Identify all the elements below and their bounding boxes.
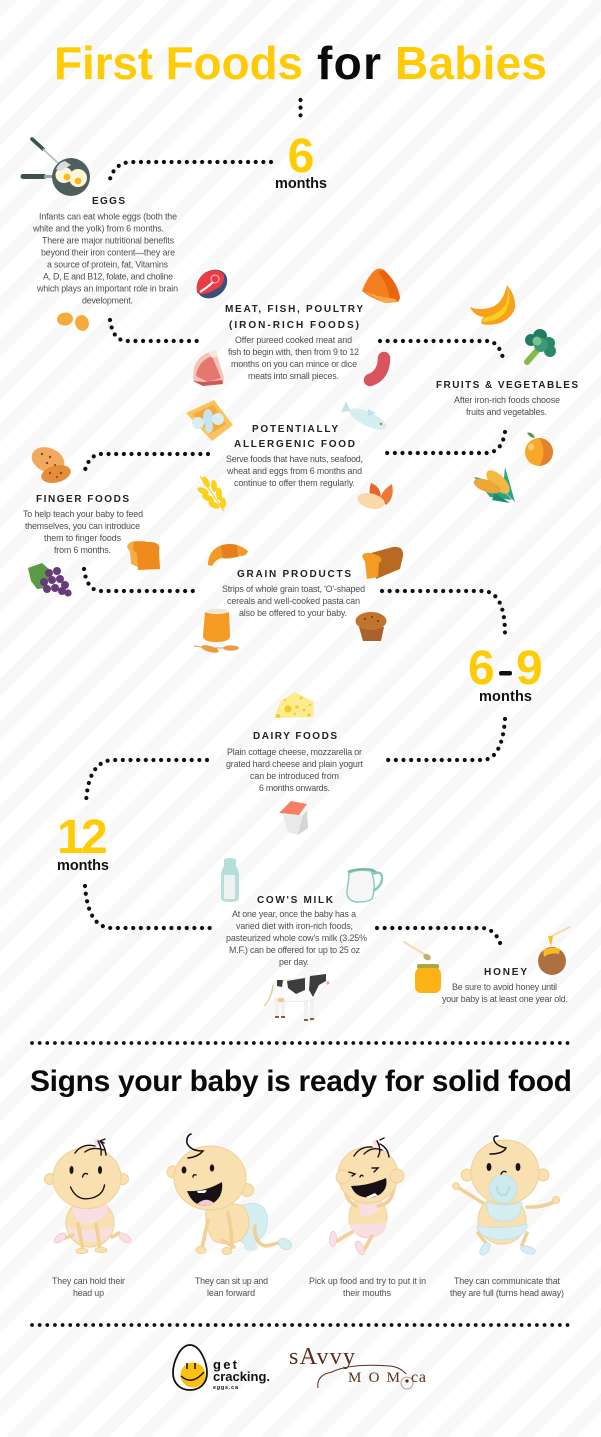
- logo: savvy mom: ca: [411, 1369, 426, 1386]
- panel: dairy foods: [226, 692, 364, 835]
- panel: honey: [404, 927, 570, 1004]
- caption: Pick up food and try to put it in: [309, 1276, 426, 1286]
- milestone: 12 months: 2: [81, 811, 108, 864]
- text: fruits description: After iron-rich foods choose: [454, 395, 560, 405]
- panel: sign 3: [309, 1138, 426, 1298]
- caption: [52, 1276, 125, 1298]
- milestone: 12 months: 1: [57, 811, 84, 864]
- text: honey description: [442, 982, 568, 1004]
- caption: They can hold their: [52, 1276, 125, 1286]
- connector: milk to honey: [377, 928, 502, 950]
- caption: head up: [73, 1288, 104, 1298]
- heading: honey: HONEY: [484, 967, 527, 978]
- panel: meat, fish, poultry: [191, 264, 400, 386]
- icon: bananas: [470, 285, 515, 325]
- caption: [309, 1276, 426, 1298]
- milestone: 6-9 months: 9: [516, 642, 543, 695]
- text: grain description: cereals and well-cooked pasta can: [227, 596, 360, 606]
- illustration: baby leaning forward: [167, 1134, 294, 1254]
- connector: dairy to 12 months: [86, 760, 207, 803]
- icon: frying pan with eggs: [23, 139, 90, 196]
- milestone: 12 months: months: [57, 858, 109, 874]
- text: fruits description: [454, 395, 560, 417]
- icon: bread loaf: [362, 547, 403, 579]
- text: eggs description: There are major nutritional benefits: [42, 236, 175, 246]
- heading: finger foods: FINGER FOODS: [36, 494, 129, 505]
- milestone: 6-9 months: 6: [468, 642, 495, 695]
- text: honey description: Be sure to avoid honey until: [452, 982, 557, 992]
- milestone: 6 months: months: [275, 176, 327, 192]
- milestone: 6 months: [275, 130, 327, 192]
- text: milk description: per day.: [279, 957, 309, 967]
- icon: grain sack: [194, 609, 239, 654]
- heading: cow's milk: COW'S MILK: [257, 895, 334, 906]
- title: for: [317, 37, 381, 89]
- heading: potentially allergenic food: [234, 424, 355, 450]
- panel: cow's milk: [221, 858, 382, 1020]
- text: fruits description: fruits and vegetables.: [466, 407, 547, 417]
- heading: meat, fish, poultry: [225, 304, 363, 331]
- text: milk description: At one year, once the baby has a: [232, 909, 356, 919]
- milestone: 6-9 months: months: [479, 689, 532, 705]
- icon: toast: [127, 541, 160, 570]
- text: milk description: pasteurized whole cow's milk (3.25%: [226, 933, 367, 943]
- panel: eggs: [23, 139, 178, 332]
- connector: 12 months to milk: [85, 886, 210, 928]
- title: [54, 37, 547, 89]
- text: milk description: M.F.) can be offered for up to 25 oz: [229, 945, 360, 955]
- text: eggs description: white and the yolk) from 6 months.: [32, 224, 164, 234]
- icon: peach: [525, 433, 553, 466]
- text: dairy description: can be introduced from: [250, 771, 339, 781]
- text: eggs description: beyond their iron content—they are: [41, 248, 175, 258]
- text: finger foods description: To help teach your baby to feed: [23, 509, 143, 519]
- caption: [195, 1276, 268, 1298]
- connector: fruits to allergenic: [380, 432, 505, 453]
- connector: title to 6 months: [298, 100, 303, 121]
- wordmark: get cracking: get: [213, 1357, 238, 1372]
- text block: grain heading: GRAIN PRODUCTS: [237, 569, 351, 580]
- text: finger foods description: themselves, you can introduce: [25, 521, 140, 531]
- heading: potentially allergenic food: POTENTIALLY: [252, 424, 338, 435]
- icon: wheat: [196, 475, 226, 511]
- text: finger foods description: from 6 months.: [54, 545, 111, 555]
- logo: savvy mom: MOM: [348, 1370, 400, 1386]
- icon: egg carton: [186, 400, 233, 441]
- text: meat description: fish to begin with, then from 9 to 12: [228, 347, 359, 357]
- logo: savvy mom: [289, 1344, 426, 1389]
- connector: 6-9 months to dairy: [382, 719, 505, 760]
- logo: get cracking: [173, 1345, 270, 1391]
- connector: allergenic to finger foods: [84, 454, 208, 474]
- icon: cow: [264, 974, 330, 1020]
- icon: roast chicken: [362, 269, 400, 303]
- wordmark: get cracking: [213, 1357, 270, 1391]
- panel: finger foods: [23, 443, 160, 597]
- text: dairy description: [226, 747, 364, 793]
- text: allergenic description: Serve foods that have nuts, seafood,: [226, 454, 363, 464]
- connector: grain to 6-9 months: [382, 591, 505, 634]
- icon: sausage: [370, 358, 384, 380]
- text: finger foods description: them to finger foods: [44, 533, 122, 543]
- icon: grapes: [28, 563, 72, 597]
- text: grain description: [222, 584, 365, 618]
- text: grain description: also be offered to your baby.: [239, 608, 347, 618]
- caption: They can communicate that: [454, 1276, 561, 1286]
- connector: eggs to meat: [110, 320, 203, 341]
- text: milk description: [226, 909, 367, 967]
- text: allergenic description: wheat and eggs from 6 months and: [226, 466, 362, 476]
- heading: fruits and vegetables: FRUITS & VEGETABLES: [436, 380, 578, 391]
- icon: fish: [341, 401, 389, 434]
- icon: cheese wedge: [274, 692, 314, 718]
- illustration: baby bringing hands to mouth: [329, 1138, 404, 1256]
- title: First Foods: [54, 37, 303, 89]
- text: meat description: [228, 335, 359, 381]
- icon: corn: [472, 466, 515, 503]
- caption: they are full (turns head away): [450, 1288, 564, 1298]
- panel: potentially allergenic food: [186, 400, 393, 512]
- logo: savvy mom: sAvvy: [289, 1344, 355, 1370]
- icon: brown eggs: [56, 311, 91, 332]
- text: grain description: Strips of whole grain toast, 'O'-shaped: [222, 584, 365, 594]
- text: eggs description: which plays an important role in brain: [36, 284, 178, 294]
- text: allergenic description: [226, 454, 363, 488]
- text: dairy description: 6 months onwards.: [259, 783, 330, 793]
- heading: potentially allergenic food: ALLERGENIC FOOD: [234, 439, 355, 450]
- text: eggs description: A, D, E and B12, folate, and choline: [43, 272, 173, 282]
- wordmark: get cracking: cracking.: [213, 1369, 270, 1384]
- icon: milk jug: [347, 869, 382, 902]
- caption: [450, 1276, 564, 1298]
- icon: cookies: [28, 443, 73, 486]
- text: allergenic description: continue to offer them regularly.: [234, 478, 355, 488]
- icon: honey pot: [538, 927, 570, 975]
- text: honey description: your baby is at least one year old.: [442, 994, 568, 1004]
- icon: salmon steak: [191, 264, 233, 304]
- heading: meat, fish, poultry: (IRON-RICH FOODS): [229, 320, 359, 331]
- text: eggs description: a source of protein, fat, Vitamins: [47, 260, 169, 270]
- heading: meat, fish, poultry: MEAT, FISH, POULTRY: [225, 304, 363, 315]
- text: finger foods description: [23, 509, 143, 555]
- panel: fruits and vegetables: [436, 285, 578, 503]
- panel: sign 4: [450, 1136, 564, 1298]
- icon: yogurt block: [279, 801, 308, 835]
- illustration: baby holding head up: [44, 1138, 133, 1254]
- heading: eggs: EGGS: [92, 196, 125, 207]
- connector: meat to fruits: [380, 341, 504, 362]
- icon: muffin: [356, 612, 386, 641]
- milestone: 6-9 months: [468, 642, 543, 705]
- milestone: 12 months: [57, 811, 109, 874]
- icon: broccoli: [525, 329, 556, 362]
- text: milk description: varied diet with iron-rich foods,: [236, 921, 353, 931]
- wordmark: get cracking: eggs.ca: [213, 1385, 239, 1391]
- connector: finger foods to grain: [84, 569, 200, 591]
- icon: peanuts and almonds: [356, 483, 393, 512]
- panel: grain products: [194, 544, 403, 654]
- divider: lower dotted line: [32, 1323, 572, 1327]
- icon: honey jar: [404, 942, 441, 993]
- milestone: 6 months: 6: [288, 130, 314, 183]
- connector: 6 months to eggs: [109, 162, 271, 183]
- icon: croissant: [208, 544, 248, 566]
- text: eggs description: development.: [82, 296, 133, 306]
- title: Babies: [395, 37, 547, 89]
- text: meat description: meats into small pieces.: [248, 371, 339, 381]
- caption: lean forward: [207, 1288, 255, 1298]
- caption: They can sit up and: [195, 1276, 268, 1286]
- text: meat description: months on you can mince or dice: [231, 359, 357, 369]
- text: dairy description: Plain cottage cheese, mozzarella or: [227, 747, 362, 757]
- text: eggs description: [32, 212, 178, 306]
- divider: upper dotted line: [32, 1041, 572, 1045]
- panel: sign 1: [44, 1138, 133, 1298]
- illustration: baby with pacifier: [453, 1136, 560, 1257]
- panel: sign 2: [167, 1134, 294, 1298]
- text: eggs description: Infants can eat whole eggs (both the: [39, 212, 177, 222]
- icon: smiling egg: [173, 1345, 207, 1390]
- heading: signs your baby is ready: Signs your baby is ready for solid food: [30, 1065, 572, 1098]
- text: meat description: Offer pureed cooked meat and: [235, 335, 352, 345]
- caption: their mouths: [343, 1288, 392, 1298]
- heading: dairy foods: DAIRY FOODS: [253, 731, 337, 742]
- icon: meat cut: [193, 350, 224, 386]
- text: dairy description: grated hard cheese and plain yogurt: [226, 759, 364, 769]
- icon: milk bottle: [221, 858, 239, 902]
